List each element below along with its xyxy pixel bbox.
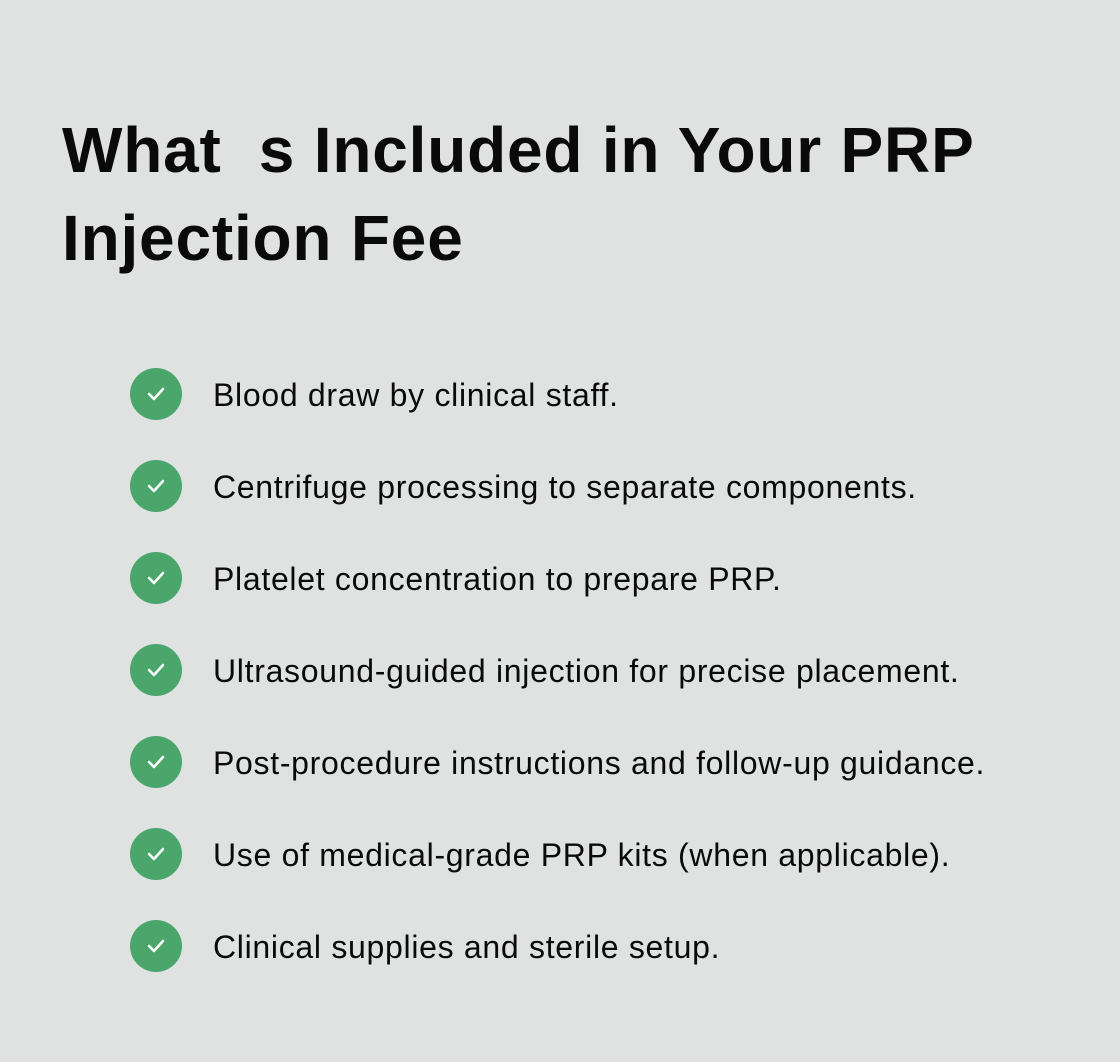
item 2 [130,460,917,512]
item 7 [130,920,720,972]
title [62,114,975,274]
item 3 [130,552,782,604]
item 6 [130,828,950,880]
item 3: Platelet concentration to prepare PRP. [213,561,782,597]
title: What s Included in Your PRP [62,114,975,186]
item 5 [130,736,985,788]
title: Injection Fee [62,202,464,274]
item 1 [130,368,619,420]
item 6: Use of medical-grade PRP kits (when applicable). [213,837,950,873]
item 4 [130,644,960,696]
item 1: Blood draw by clinical staff. [213,377,619,413]
item 5: Post-procedure instructions and follow-up guidance. [213,745,985,781]
item 4: Ultrasound-guided injection for precise placement. [213,653,960,689]
item 2: Centrifuge processing to separate components. [213,469,917,505]
item 7: Clinical supplies and sterile setup. [213,929,720,965]
